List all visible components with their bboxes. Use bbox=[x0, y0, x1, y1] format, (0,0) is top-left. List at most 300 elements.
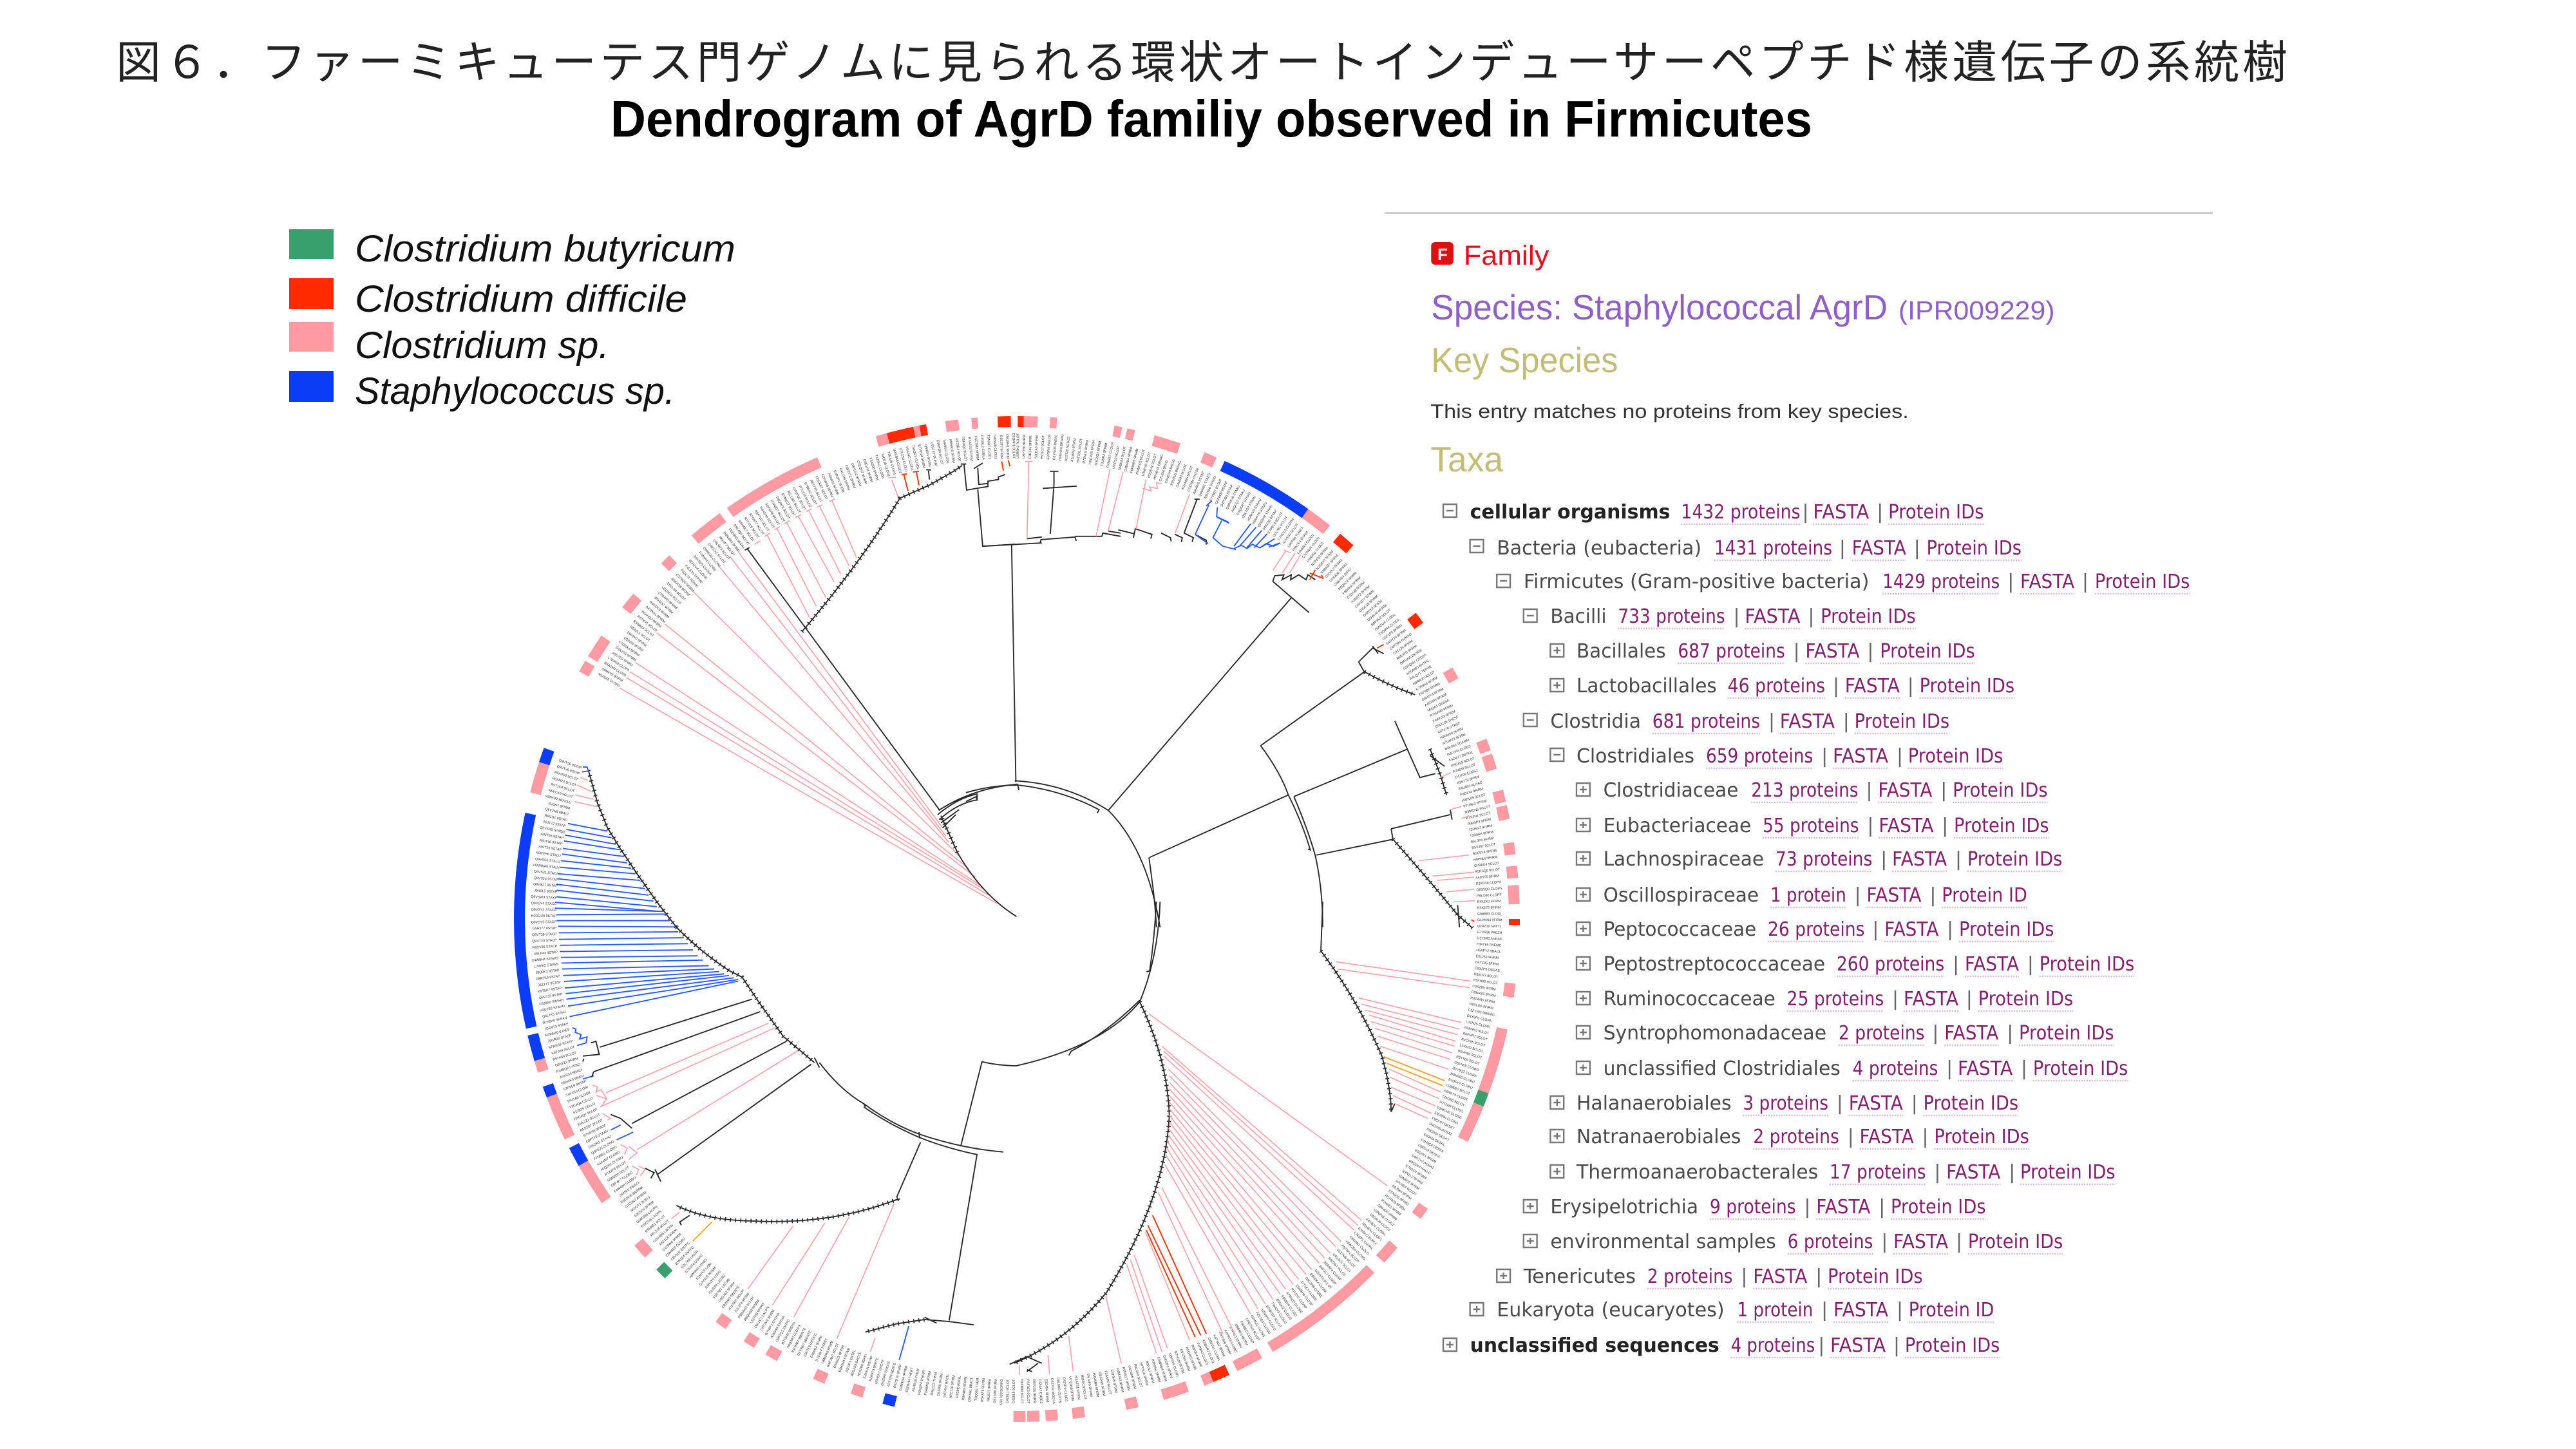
leaf labels: right half: G9Q1K4 HALLC bbox=[1408, 1159, 1432, 1176]
leaf labels: lower-left arc: J9GR03 STAEP bbox=[547, 1034, 573, 1044]
leaf labels: lower-left arc: S3V2G8 LACPN bbox=[641, 1210, 663, 1229]
leaf labels: upper-left arc: U2NJM8 CLOD1 bbox=[892, 448, 902, 474]
leaf labels: lower-left arc: U5LP44 9STAP bbox=[534, 951, 558, 956]
leaf labels: right half: D6B9K5 9FIRM bbox=[1234, 1323, 1249, 1346]
leaf labels: right half: R7L5Y2 CLOSP bbox=[1290, 1287, 1308, 1310]
leaf labels: lower-left arc: A3TYP4 9ENTE bbox=[887, 1362, 897, 1387]
leaf labels: upper-left arc: T4A3R7 CLOD1 bbox=[911, 444, 920, 469]
leaf labels: upper-left arc: R7V1J4 9CLOT bbox=[798, 485, 812, 509]
taxon row: Syntrophomonadaceae: Protein IDs bbox=[2019, 1022, 2114, 1045]
leaf labels: right half: F9CK07 DESK7 bbox=[1431, 1117, 1455, 1131]
leaf labels: right half: T4M9R4 CLOD1 bbox=[1297, 533, 1315, 556]
leaf labels: right half: A5N6V6 9STAP bbox=[1193, 471, 1206, 495]
taxon row: cellular organisms: FASTA bbox=[1813, 501, 1870, 524]
taxon row: Lachnospiraceae: FASTA bbox=[1892, 848, 1947, 871]
leaf labels: right half: F4D4Y7 DESOL bbox=[1449, 750, 1473, 762]
leaf labels: right half: R6M7K2 9FIRM bbox=[1115, 1368, 1124, 1393]
leaf labels: right half: S4NY70 9FIRM bbox=[1385, 629, 1407, 646]
leaf labels: lower-left arc: C8P1V4 9FIRM bbox=[760, 1309, 775, 1332]
taxon row: Clostridia: Clostridia bbox=[1550, 710, 1641, 733]
leaf labels: upper-left arc: U5CM72 9CLOT bbox=[661, 586, 682, 606]
leaf labels: right half: R7EVL5 9FIRM bbox=[1083, 440, 1090, 464]
leaf labels: right half: T0U6R2 9FIRM bbox=[1100, 442, 1108, 467]
taxon row: Tenericutes: | bbox=[1815, 1265, 1822, 1288]
leaf labels: right half: F9D1T4 9FIRM bbox=[1460, 787, 1484, 797]
icon: family badge bbox=[1431, 242, 1454, 265]
leaf labels: lower-left arc: N9X2T7 9LBT3 bbox=[630, 1196, 651, 1213]
leaf labels: right half: Q8S5Q0 CLOPS bbox=[1476, 887, 1502, 892]
leaf labels: lower-left arc: R7H9H8 9FIRM bbox=[583, 1124, 606, 1139]
taxon row: Halanaerobiales: FASTA bbox=[1849, 1092, 1903, 1115]
legend bbox=[289, 228, 735, 412]
taxon row: Peptostreptococcaceae: | bbox=[1953, 953, 1959, 976]
leaf labels: right half: C6D4A5 9FIRM bbox=[1127, 1365, 1137, 1390]
leaf labels: right half: C7D5J8 9FIRM bbox=[1347, 581, 1366, 600]
taxon row: Clostridiaceae: FASTA bbox=[1878, 779, 1933, 802]
leaf labels: right half: P9K2E4 9FIRM bbox=[1292, 531, 1309, 552]
leaf labels: right half: T3H6Y9 CLOSG bbox=[1270, 1302, 1287, 1325]
leaf labels: right half: C7R9H6 9FIRM bbox=[1416, 676, 1438, 692]
leaf labels: upper-left arc: Q9V5I3 9FIRM bbox=[923, 444, 931, 468]
taxon row: Tenericutes: FASTA bbox=[1753, 1265, 1808, 1288]
leaf labels: upper-left arc: U5S7X7 9FIRM bbox=[929, 442, 938, 466]
leaf labels: right half: H9PNL8 9FIRM bbox=[1473, 855, 1498, 862]
leaf labels: right half: E5Q5Y1 9FIRM bbox=[1414, 1149, 1437, 1164]
leaf labels: right half: Q9RMG9 STAAU bbox=[1226, 485, 1241, 510]
taxon row: Peptococcaceae bbox=[1577, 918, 2054, 942]
leaf labels: upper-left arc: R5D5H5 9FIRM bbox=[728, 528, 745, 549]
leaf labels: upper-left arc: E5VLS0 9CLOT bbox=[666, 582, 687, 602]
leaf labels: right half: D2D5T6 9CLOT bbox=[1313, 1269, 1332, 1291]
taxon row: unclassified sequences: Protein IDs bbox=[1905, 1334, 2000, 1357]
leaf labels: upper-left arc: R5KHS9 9FIRM bbox=[670, 577, 690, 597]
leaf labels: upper-left arc: ASX6Z8 CLOR5 bbox=[597, 672, 620, 688]
leaf labels: lower-left arc: E2R7K9 LISM bbox=[696, 1262, 713, 1281]
leaf labels: lower-left arc: C4Z8L1 9CLOT bbox=[1006, 1379, 1010, 1403]
leaf labels: lower-left arc: R6ZM24 9CLOT bbox=[552, 777, 577, 788]
leaf labels: lower-left arc: E6P4Y5 LISIO bbox=[705, 1270, 722, 1289]
leaf labels: lower-left arc: G5RJ77 9STAP bbox=[533, 927, 557, 931]
taxon row: Eubacteriaceae: 55 proteins bbox=[1763, 815, 1859, 837]
taxon row: Erysipelotrichia: FASTA bbox=[1816, 1196, 1871, 1218]
leaf labels: lower-left arc: Y3C4Q4 CELLO bbox=[569, 1097, 594, 1110]
leaf labels: right half: B5VH86 9CLOT bbox=[1457, 1049, 1482, 1060]
leaf labels: lower-left arc: C9L7B3 DORFO bbox=[999, 1379, 1004, 1405]
leaf labels: upper-left arc: F3AB96 9FIRM bbox=[868, 457, 879, 481]
taxon row: Clostridiaceae: | bbox=[1940, 779, 1947, 802]
leaf labels: lower-left arc: H0DGU0 9STAP bbox=[531, 914, 556, 918]
taxon row: Oscillospiraceae bbox=[1577, 884, 2027, 907]
taxon row: unclassified sequences: FASTA bbox=[1830, 1334, 1886, 1357]
leaf labels: upper-left arc: C7G4H0 9FIRM bbox=[657, 591, 677, 611]
taxon row: unclassified sequences bbox=[1443, 1334, 2000, 1358]
taxon row: Bacilli: | bbox=[1734, 605, 1740, 628]
leaf labels: upper-left arc: T4A9G3 CLOD1 bbox=[942, 439, 949, 464]
leaf labels: right half: E6D6I4 DESRL bbox=[1423, 1133, 1446, 1148]
taxon row: Natranaerobiales: | bbox=[1848, 1126, 1854, 1148]
taxon row: Lactobacillales: Protein IDs bbox=[1920, 675, 2014, 697]
taxon row: environmental samples: environmental samples bbox=[1550, 1231, 1776, 1253]
leaf labels: right half: F4WC23 9FIRM bbox=[1432, 710, 1456, 724]
leaf labels: right half: C7HCL0 CLOTM bbox=[1277, 518, 1295, 542]
leaf labels: lower-left arc: Q9P5J5 CLOBO bbox=[591, 1140, 615, 1155]
leaf labels: lower-left arc: C9Z8M2 9BENTE bbox=[721, 1285, 741, 1309]
taxon row: Tenericutes: 2 proteins bbox=[1647, 1265, 1733, 1288]
leaf labels: right half: D4HU77 9FIRM bbox=[1354, 590, 1375, 609]
leaf labels: right half: E5LJ53 9FIRM bbox=[1475, 954, 1499, 960]
leaf labels: lower-left arc: G9H0X7 BACTE bbox=[875, 1359, 886, 1385]
leaf labels: right half: R5N5G7 9FIRM bbox=[1121, 1367, 1130, 1391]
taxon row: Bacteria: 1431 proteins bbox=[1714, 537, 1832, 560]
leaf labels: lower-left arc: L3Z7H8 9FIRM bbox=[750, 1303, 766, 1324]
leaf labels: lower-left arc: F9R7B7 LACRE bbox=[713, 1278, 732, 1300]
taxon row: Halanaerobiales: 3 proteins bbox=[1743, 1092, 1828, 1115]
leaf labels: right half: U2IP10 9CLOT bbox=[1112, 445, 1121, 469]
taxon row: Clostridiales: Clostridiales bbox=[1577, 745, 1694, 768]
taxon row: Tenericutes bbox=[1497, 1265, 1923, 1289]
leaf labels: right half: A5D5T5 9FIRM bbox=[1475, 874, 1499, 880]
leaf labels: lower-left arc: Q9VSY4 STACC bbox=[531, 902, 557, 906]
leaf labels: right half: R5WKP2 9CLOT bbox=[1135, 448, 1146, 475]
leaf labels: lower-left arc: R9NF80 9BACLU bbox=[545, 795, 572, 805]
taxon row: unclassified Clostridiales: | bbox=[2021, 1057, 2027, 1080]
leaf labels: right half bbox=[1016, 433, 1502, 1405]
divider rule of the InterPro panel bbox=[1385, 212, 2213, 214]
leaf labels: right half: R9F3L7 9FIRM bbox=[1144, 1360, 1155, 1384]
leaf labels: right half: C4Z3P9 CLOD1 bbox=[1062, 1377, 1068, 1402]
leaf labels: right half: P8LO80 CLOPF bbox=[1477, 893, 1502, 898]
leaf labels: right half: B0N3U4 CLOD1 bbox=[1374, 613, 1396, 632]
leaf labels: right half: Q6UK61 STAEQ bbox=[1198, 473, 1212, 497]
leaf labels: upper-left arc: A0H9C0 9FIRM bbox=[948, 439, 955, 463]
taxon row: environmental samples: Protein IDs bbox=[1968, 1231, 2063, 1253]
taxon row: Erysipelotrichia: Protein IDs bbox=[1891, 1196, 1986, 1218]
taxon row: Lactobacillales bbox=[1550, 675, 2014, 698]
leaf labels: right half: D5C2N8 CLOBL bbox=[1304, 1276, 1323, 1298]
taxon row: Peptococcaceae: Protein IDs bbox=[1959, 918, 2054, 941]
leaf labels: lower-left arc: Q9VS21 STACA bbox=[534, 870, 559, 876]
taxon row: Firmicutes: Protein IDs bbox=[2095, 571, 2190, 593]
leaf labels: upper-left arc: C8P5G2 9FIRM bbox=[850, 462, 862, 487]
leaf labels: upper-left arc: R6FEP8 9CLOT bbox=[764, 503, 781, 526]
leaf labels: right half: D9GX69 ACEAZ bbox=[1428, 1122, 1453, 1137]
leaf labels: right half: A4K9U3 CLOBE bbox=[1223, 1329, 1238, 1354]
leaf labels: lower-left arc: G5N4Z3 9FIRM bbox=[833, 1345, 846, 1368]
taxon row: Clostridia bbox=[1524, 710, 1949, 734]
leaf labels: lower-left arc: D5L2C1 LACPN bbox=[754, 1306, 771, 1329]
taxon row: Eukaryota: | bbox=[1897, 1299, 1903, 1321]
leaf labels: right half: G7B8U4 9CLOT bbox=[1474, 862, 1500, 868]
leaf labels: upper-left arc: R7B6A2 9CLOT bbox=[803, 482, 817, 506]
leaf labels: lower-left arc: Q8V7J2 9STAP bbox=[539, 992, 564, 1000]
leaf labels: upper-left arc: F6C7M2 9FIRM bbox=[973, 436, 980, 460]
leaf labels: lower-left arc: A9JT25 9STAP bbox=[538, 845, 562, 852]
leaf labels: upper-left arc: E4M5D4 9CLOT bbox=[936, 440, 943, 466]
taxon row: Clostridiales: Protein IDs bbox=[1908, 745, 2003, 768]
leaf labels: upper-left arc: R5LUK9 9CLOT bbox=[786, 490, 801, 515]
leaf labels: lower-left arc: A5Z1L8 9FIRM bbox=[659, 1228, 678, 1247]
leaf labels: lower-left arc: A0M9H3 LISMO bbox=[688, 1258, 708, 1279]
leaf labels: right half: E8N0K4 CLOBL bbox=[1309, 1273, 1327, 1294]
taxon row: Lachnospiraceae: Lachnospiraceae bbox=[1604, 848, 1764, 871]
leaf labels: right half: T3R5N7 9FIRM bbox=[1468, 824, 1493, 833]
leaf labels: lower-left arc: M3W940 STAEP bbox=[545, 1028, 571, 1038]
leaf labels: lower-left arc: A0Q2E2 CLOBO bbox=[600, 1156, 624, 1172]
taxon row: Peptococcaceae: | bbox=[1872, 918, 1879, 941]
leaf labels: right half: H2M6B8 9FIRM bbox=[1092, 1373, 1099, 1397]
taxon row: Tenericutes: Tenericutes bbox=[1523, 1265, 1636, 1288]
leaf labels: upper-left arc: D5A0I3 9FIRM bbox=[623, 636, 643, 652]
leaf labels: right half: B6J5K4 9FIRM bbox=[1391, 1184, 1412, 1201]
leaf labels: right half: B6FB89 9CLOT bbox=[1019, 1379, 1024, 1404]
leaf labels: lower-left arc: C8V5U2 ENTFC bbox=[670, 1241, 691, 1262]
leaf labels: right half: M0DA1 DESSA bbox=[1427, 699, 1450, 713]
leaf labels: lower-left arc: R5TK69 9CLOT bbox=[553, 1051, 578, 1062]
taxon row: cellular organisms: cellular organisms bbox=[1470, 501, 1671, 524]
leaf labels: right half: F4LQY1 TEPHE bbox=[1409, 665, 1433, 681]
leaf labels: lower-left arc: A3X5S4 9BACI bbox=[559, 1068, 583, 1080]
taxon row: Halanaerobiales: | bbox=[1837, 1092, 1843, 1115]
taxon row: Eubacteriaceae: Eubacteriaceae bbox=[1604, 815, 1751, 837]
leaf labels: right half: E9U3N4 CLOSG bbox=[1434, 1112, 1459, 1126]
taxon row: Clostridia: FASTA bbox=[1780, 710, 1835, 733]
leaf labels: lower-left arc: G2L7A8 LISGR bbox=[680, 1250, 699, 1269]
leaf labels: right half: M5A7S1 9FIRM bbox=[1074, 1376, 1081, 1400]
leaf labels: lower-left arc: C6P4F7 CLOBO bbox=[611, 1171, 634, 1188]
leaf labels: right half: L7EN25 CLOPA bbox=[1465, 1020, 1490, 1029]
taxon row: Syntrophomonadaceae: 2 proteins bbox=[1839, 1022, 1925, 1045]
branches: upper-right quadrant bbox=[966, 462, 1475, 928]
taxon row: Bacilli: FASTA bbox=[1745, 605, 1801, 628]
taxon row: Erysipelotrichia: | bbox=[1804, 1196, 1810, 1218]
leaf labels: right half: P5T517 9CLOT bbox=[1041, 435, 1046, 459]
leaf labels: right half: H0DPT9 STAAU bbox=[1252, 501, 1268, 525]
taxon row: Oscillospiraceae: | bbox=[1929, 884, 1936, 907]
leaf labels: upper-left arc: R5GKE7 9CLOT bbox=[814, 476, 828, 501]
taxon row: Bacilli: | bbox=[1808, 605, 1814, 628]
colour ring around dendrogram bbox=[519, 421, 1515, 1417]
heading: Species: (IPR009229) bbox=[1899, 296, 2054, 325]
leaf labels: lower-left arc: A2K5N4 ENTHA bbox=[770, 1315, 786, 1339]
leaf labels: lower-left arc: R8Q5G9 9FIRM bbox=[743, 1300, 761, 1322]
leaf labels: right half: R3K275 9FIRM bbox=[1477, 906, 1501, 910]
taxon row: Bacillales: Protein IDs bbox=[1880, 640, 1975, 663]
leaf labels: right half: E3H9U2 EUBLK bbox=[1357, 1227, 1378, 1247]
leaf labels: right half: R9P2F4 9FIRM bbox=[1190, 1344, 1202, 1368]
leaf labels: lower-left arc: A0G3S8 BACCE bbox=[850, 1351, 862, 1377]
leaf labels: right half: C0Q7W3 9CLOT bbox=[1244, 1318, 1261, 1342]
leaf labels: upper-left arc: D6E1H4 9FIRM bbox=[862, 459, 873, 483]
leaf labels: right half: C6PQM1 CRO2S bbox=[1403, 653, 1428, 671]
leaf labels: lower-left arc: C9P7T3 STAAU bbox=[585, 1130, 609, 1144]
taxon row: Clostridiaceae bbox=[1577, 779, 2048, 802]
leaf labels: right half: R6FNR7 9CLOT bbox=[1463, 1032, 1488, 1042]
leaf labels: upper-left arc: R7J1B4 9CLOT bbox=[954, 438, 961, 463]
branches: upper-left quadrant bbox=[556, 460, 1018, 927]
leaf labels: lower-left arc: R5H4K5 9BACI bbox=[561, 1074, 585, 1086]
leaf labels: right half: G4VL58 9FIRM bbox=[1359, 594, 1379, 613]
leaf labels: right half: D9R4H5 DESRE bbox=[1399, 649, 1423, 666]
taxon row: Thermoanaerobacterales: Thermoanaerobacterales bbox=[1576, 1161, 1818, 1184]
taxon row: Oscillospiraceae: Oscillospiraceae bbox=[1604, 884, 1759, 907]
leaf labels: upper-left arc: D5HA57 9FIRM bbox=[653, 596, 674, 615]
leaf labels: right half: H9DL05 9CLOT bbox=[1461, 793, 1486, 803]
leaf labels: right half: E6LJP4 9FIRM bbox=[1471, 837, 1494, 844]
leaf labels: right half: C9Y1J5 9FIRM bbox=[1392, 639, 1414, 656]
leaf labels: lower-left arc: C9M6E0 CLOBU bbox=[665, 1237, 687, 1258]
leaf labels: right half: D9R3P1 9FIRM bbox=[1162, 1355, 1173, 1379]
leaf labels: lower-left arc: Q9VT56 9STAP bbox=[558, 759, 583, 770]
taxon row: Peptostreptococcaceae: FASTA bbox=[1965, 953, 2020, 976]
taxon row: Firmicutes: Firmicutes (Gram-positive bacteria) bbox=[1524, 571, 1869, 593]
leaf labels: lower-left arc: U5G3A2 9FIRM bbox=[718, 1282, 736, 1303]
leaf labels: lower-left arc: R5M8A1 9CLOT bbox=[645, 1214, 667, 1234]
taxon row: Lactobacillales: | bbox=[1908, 675, 1914, 697]
taxon row: Eubacteriaceae: | bbox=[1942, 815, 1948, 837]
leaf labels: upper-left arc: F6JK73 TEPHE bbox=[679, 569, 699, 589]
leaf labels: right half: R5P2G5 9FIRM bbox=[1032, 1379, 1036, 1403]
taxon row: Lactobacillales: Lactobacillales bbox=[1577, 675, 1717, 697]
leaf labels: right half: B2V5Q2 CLOBA bbox=[1452, 1066, 1477, 1079]
leaf labels: right half: S2LEA6 9FIRM bbox=[1034, 435, 1039, 459]
leaf labels: lower-left arc: Q9VSY2 STACA bbox=[531, 908, 557, 913]
leaf labels: lower-left arc: K9T5U7 9STAP bbox=[538, 987, 562, 994]
leaf labels: right half: U4A9E0 CLOD1 bbox=[1306, 542, 1325, 564]
leaf labels: right half: U7Q2H8 9FIRM bbox=[1068, 1376, 1074, 1401]
taxon row: Thermoanaerobacterales: Protein IDs bbox=[2020, 1161, 2116, 1184]
taxon row: Thermoanaerobacterales: | bbox=[1934, 1161, 1940, 1184]
taxon row: Peptococcaceae: FASTA bbox=[1884, 918, 1939, 941]
leaf labels: right half: G8N3U1 CLOD1 bbox=[1207, 1337, 1221, 1362]
leaf labels: right half: B1Q5Y2 CLOBU bbox=[1448, 1078, 1473, 1090]
taxon row: Syntrophomonadaceae: | bbox=[2007, 1022, 2013, 1045]
taxon row: Bacillales: 687 proteins bbox=[1678, 640, 1785, 663]
leaf labels: right half: C4F7M4 EUMAD bbox=[1389, 632, 1413, 651]
leaf labels: right half: R5TRU8 9FIRM bbox=[1384, 1194, 1406, 1212]
leaf labels: right half: R7H0J8 9FIRM bbox=[1173, 1351, 1185, 1374]
taxon row: unclassified sequences: | bbox=[1818, 1334, 1824, 1357]
leaf labels: right half: Q4P8Q0 9STAP bbox=[1215, 480, 1229, 505]
leaf labels: right half: F2E7B3 CLOSG bbox=[1255, 1311, 1271, 1335]
leaf labels: lower-left arc: B3Z5R5 BACCE bbox=[880, 1361, 891, 1386]
leaf labels: lower-left arc: E4B6G2 9FIRM bbox=[810, 1335, 824, 1359]
leaf labels: right half: C8P4D0 9FIRM bbox=[1376, 1204, 1397, 1222]
leaf labels: right half: R4L6S9 9CLOT bbox=[1133, 1363, 1143, 1388]
leaf labels: lower-left arc: J5J0H7 9FIRM bbox=[547, 802, 570, 811]
leaf labels: upper-left arc: E7VH14 9FIRM bbox=[917, 444, 925, 468]
taxon row: environmental samples: | bbox=[1956, 1231, 1962, 1253]
taxon row: cellular organisms: Protein IDs bbox=[1888, 501, 1984, 524]
taxon row: Eukaryota: | bbox=[1821, 1299, 1828, 1321]
taxon row: Clostridiales: | bbox=[1897, 745, 1903, 768]
taxon row: Clostridiales: | bbox=[1821, 745, 1828, 768]
leaf labels: right half: G7VB36 PAEZH bbox=[1477, 931, 1502, 935]
leaf labels: right half: G9YT56 9FIRM bbox=[1022, 435, 1027, 459]
taxon row: unclassified Clostridiales: 4 proteins bbox=[1853, 1057, 1938, 1080]
taxon row: Natranaerobiales: Protein IDs bbox=[1934, 1126, 2029, 1148]
leaf labels: right half: R5XJ07 9CLOT bbox=[1472, 842, 1497, 850]
leaf labels: lower-left arc: T4V4K0 CLOIR bbox=[565, 1085, 589, 1097]
leaf labels: right half: R4X5P0 CLOPA bbox=[1466, 1014, 1492, 1023]
leaf labels: right half: G8J3W9 9FIRM bbox=[1097, 1372, 1106, 1396]
leaf labels: upper-left arc: D9QAP8 9CLOT bbox=[1011, 433, 1016, 459]
taxon row: Thermoanaerobacterales: | bbox=[2009, 1161, 2015, 1184]
leaf labels: right half: C3H9C8 DESKA bbox=[1420, 1138, 1444, 1154]
leaf labels: lower-left arc: Q9VT36 9STAP bbox=[556, 765, 581, 776]
leaf labels: right half: U4Q2C1 9CLOT bbox=[1331, 1253, 1352, 1274]
leaf labels: lower-left arc: G2M9W4 9FIRM bbox=[899, 1366, 909, 1392]
leaf labels: right half: C2L8J6 9BACI bbox=[1159, 459, 1170, 482]
leaf labels: upper-left arc: C9D9L2 EUBLA bbox=[980, 435, 985, 460]
taxon row: Firmicutes: FASTA bbox=[2020, 571, 2075, 593]
leaf labels: lower-left arc: N6M2D5 9CLOT bbox=[607, 1166, 630, 1183]
leaf labels: upper-left arc: R6N4M4 9FIRM bbox=[722, 531, 740, 553]
leaf labels: right half: F5T7M8 9CLOT bbox=[1336, 1249, 1356, 1269]
leaf labels: right half: E5F9B6 9FIRM bbox=[1418, 682, 1441, 697]
legend: Clostridium sp. bbox=[355, 325, 609, 366]
leaf labels: right half: G5H6Y8 9FIRM bbox=[1367, 604, 1388, 623]
leaf labels: lower-left arc: F3A8W5 9FIRM bbox=[924, 1371, 933, 1396]
leaf labels: right half: R5Q4K5 9FIRM bbox=[1184, 1347, 1197, 1370]
leaf labels: lower-left arc: R7X6H0 9NEKV bbox=[542, 1016, 568, 1025]
leaf labels: lower-left arc: F4W686 CLOBO bbox=[614, 1176, 637, 1194]
leaf labels: right half: R7A0I8 9CLOT bbox=[1453, 763, 1477, 774]
leaf labels: lower-left arc: F3F7K9 GROCC bbox=[803, 1332, 818, 1358]
taxon row: Peptostreptococcaceae: 260 proteins bbox=[1837, 953, 1944, 976]
taxon row: Ruminococcaceae: | bbox=[1892, 988, 1899, 1010]
leaf labels: lower-left arc: R7X2F4 9CLOT bbox=[604, 1160, 627, 1177]
leaf labels: right half: R8X027 9CLOT bbox=[1473, 972, 1499, 980]
leaf labels: right half: N2G8H7 9FIRM bbox=[1316, 550, 1334, 571]
taxon row: cellular organisms: 1432 proteins bbox=[1681, 501, 1800, 524]
taxon row: Eukaryota bbox=[1470, 1299, 1994, 1322]
taxon row: Natranaerobiales: 2 proteins bbox=[1753, 1126, 1839, 1148]
title: English: Dendrogram of AgrD familiy observed in Firmicutes bbox=[611, 90, 1812, 147]
taxon row: Clostridiaceae: Clostridiaceae bbox=[1604, 779, 1738, 802]
taxon row: Lactobacillales: | bbox=[1833, 675, 1839, 697]
taxon row: unclassified Clostridiales: FASTA bbox=[1958, 1057, 2013, 1080]
taxon row: Peptococcaceae: | bbox=[1947, 918, 1953, 941]
taxon row: Ruminococcaceae: FASTA bbox=[1904, 988, 1959, 1010]
panel: InterPro taxonomy bbox=[1430, 240, 2190, 1358]
leaf labels: right half: P5T9F4 9CLOT bbox=[1340, 1244, 1360, 1264]
leaf labels: right half: H1M5T2 9FIRM bbox=[1350, 585, 1371, 605]
leaf labels: lower-left arc: R6L3J4 9CLOT bbox=[650, 1219, 670, 1238]
leaf labels: lower-left arc: F2J8Z9 CELLO bbox=[573, 1102, 596, 1115]
taxon row: Natranaerobiales: FASTA bbox=[1860, 1126, 1914, 1148]
taxon row: Peptostreptococcaceae: Peptostreptococcaceae bbox=[1604, 953, 1825, 976]
leaf labels: right half: R9XLG5 9FIRM bbox=[1469, 1002, 1493, 1010]
leaf labels: right half: H0AKV0 STAAU bbox=[1247, 498, 1263, 522]
leaf labels: right half: G9QRJ9 CLOD2 bbox=[1368, 1213, 1391, 1233]
leaf labels: lower-left arc: R2R9T3 9BETE bbox=[869, 1357, 880, 1382]
taxon row: Eubacteriaceae: Protein IDs bbox=[1954, 815, 2049, 837]
leaf labels: right half: D9MCH0 CLOSG bbox=[1436, 1106, 1463, 1121]
leaf labels: right half: R5FH02 9CLOT bbox=[1473, 978, 1499, 986]
taxon row: Clostridiaceae: Protein IDs bbox=[1953, 779, 2048, 802]
taxon row: Eukaryota: Protein ID bbox=[1909, 1299, 1994, 1321]
leaf labels: upper-left arc: V0AJ4C CLOD1 bbox=[904, 446, 914, 471]
leaf labels: right half: G4N593 9CLOT bbox=[1176, 463, 1188, 488]
leaf labels: right half: R3X5S9 CLOPH bbox=[1476, 880, 1502, 886]
leaf labels: upper-left arc: A6D7E9 9FIRM bbox=[611, 651, 633, 668]
leaf labels: right half: D8L0M3 CLOTB bbox=[1056, 1378, 1062, 1403]
taxon row: Erysipelotrichia: 9 proteins bbox=[1710, 1196, 1796, 1218]
taxon row: Halanaerobiales: | bbox=[1911, 1092, 1918, 1115]
taxon row: Eukaryota: 1 protein bbox=[1737, 1299, 1813, 1321]
leaf labels: right half: D4BGM4 9FIRM bbox=[1124, 447, 1133, 472]
leaf labels: right half: D9UC39 THESF bbox=[1435, 715, 1460, 729]
